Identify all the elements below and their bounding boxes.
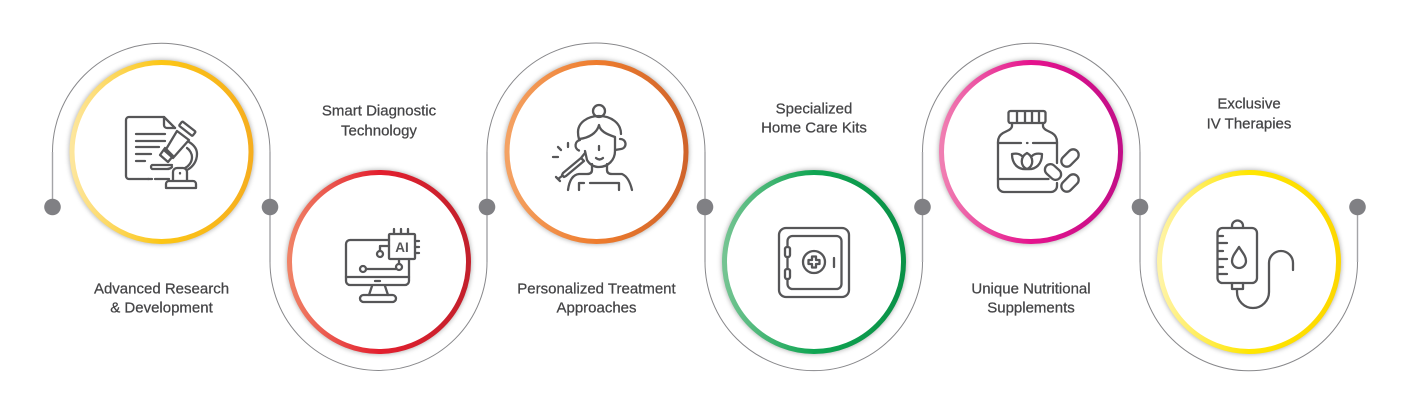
icon: woman with syringe — [553, 105, 632, 190]
label: Specialized — [776, 100, 852, 118]
icon: supplement jar — [998, 111, 1081, 194]
ring: green — [724, 172, 904, 352]
label: Supplements — [987, 300, 1075, 316]
label: IV Therapies — [1207, 116, 1291, 132]
ring: red — [290, 172, 468, 352]
label — [322, 102, 437, 140]
label — [517, 280, 677, 316]
label: Exclusive — [1217, 96, 1281, 112]
ring: magenta — [942, 62, 1120, 242]
label: Technology — [341, 122, 417, 140]
ring: yellow bright — [1160, 172, 1338, 352]
label: Home Care Kits — [761, 120, 867, 136]
step 3: personalized treatment — [507, 62, 686, 316]
step 2: smart diagnostic — [290, 102, 468, 352]
label — [761, 100, 867, 136]
icon: IV bag — [1218, 221, 1293, 308]
icon: safe — [779, 228, 849, 297]
label — [94, 280, 229, 316]
step 6: iv therapies — [1160, 96, 1338, 352]
step 1: advanced research — [72, 62, 251, 316]
connector line — [52, 43, 1358, 371]
label: Unique Nutritional — [971, 280, 1091, 298]
label — [971, 280, 1091, 316]
label — [1207, 96, 1291, 132]
timeline dots — [44, 199, 1366, 215]
ring: yellow — [72, 62, 251, 242]
icon: document and microscope — [126, 117, 197, 188]
label: Approaches — [556, 300, 637, 316]
icon: AI monitor — [346, 229, 419, 302]
step 5: nutritional supplements — [942, 62, 1120, 316]
icon text: AI: AI — [395, 240, 409, 255]
label: Advanced Research — [94, 280, 229, 298]
ring: orange — [507, 62, 686, 242]
label: & Development — [110, 300, 214, 316]
label: Personalized Treatment — [517, 280, 677, 298]
step 4: home care kits — [724, 100, 904, 352]
label: Smart Diagnostic — [322, 102, 437, 120]
